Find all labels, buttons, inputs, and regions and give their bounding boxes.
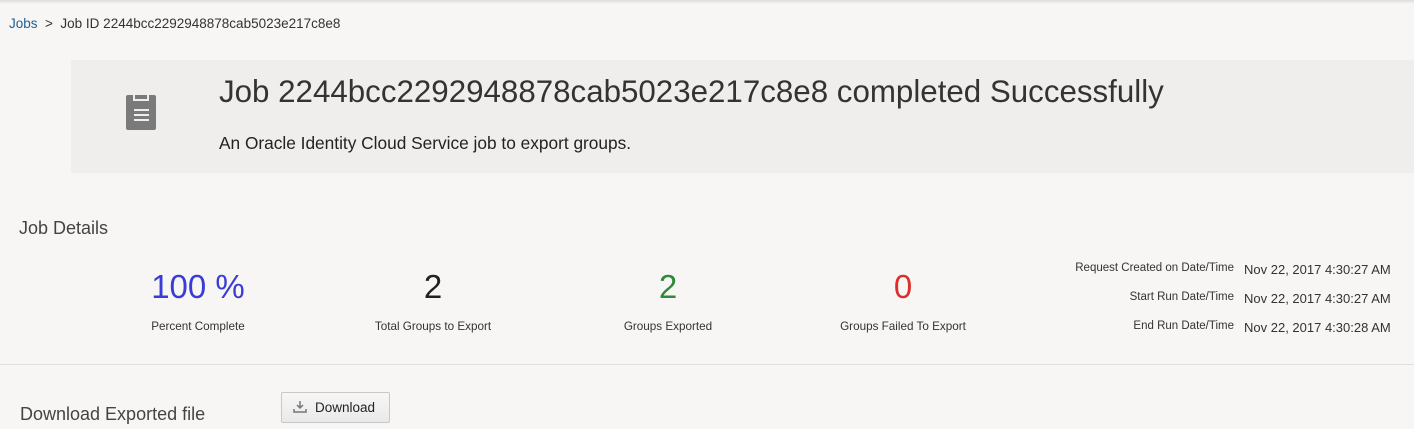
date details: Nov 22, 2017 4:30:27 AM xyxy=(1244,291,1391,306)
stat: total groups: Total Groups to Export xyxy=(375,320,491,333)
title: Job 2244bcc2292948878cab5023e217c8e8 completed Successfully xyxy=(219,74,1164,109)
stat: total groups: 2 xyxy=(424,268,442,305)
header panel xyxy=(71,60,1414,173)
date details: Request Created on Date/Time xyxy=(1075,262,1234,274)
stat: groups exported: Groups Exported xyxy=(624,320,712,333)
stat: groups failed: Groups Failed To Export xyxy=(840,320,966,333)
download label: Download Exported file xyxy=(20,404,205,424)
stat: groups exported xyxy=(624,268,712,333)
download button xyxy=(281,392,390,423)
icon: job clipboard xyxy=(126,95,156,130)
section heading: job details: Job Details xyxy=(19,218,108,238)
breadcrumb: Jobs > Job ID 2244bcc2292948878cab5023e217c8e8 xyxy=(9,16,340,31)
top shadow bar xyxy=(0,0,1414,4)
stat: total groups xyxy=(375,268,492,333)
stat: groups failed: 0 xyxy=(894,268,912,305)
download button: Download xyxy=(315,400,375,415)
date details: Nov 22, 2017 4:30:28 AM xyxy=(1244,320,1391,335)
stat: percent complete: Percent Complete xyxy=(151,320,245,333)
icon: download xyxy=(293,401,307,413)
stat: percent complete: 100 % xyxy=(151,268,245,305)
stat: percent complete xyxy=(151,268,245,333)
date details xyxy=(1075,262,1391,335)
date details: Start Run Date/Time xyxy=(1130,291,1234,303)
subtitle: An Oracle Identity Cloud Service job to export groups. xyxy=(219,133,631,153)
stat: groups exported: 2 xyxy=(659,268,677,305)
date details: End Run Date/Time xyxy=(1133,320,1234,332)
stat: groups failed xyxy=(840,268,966,333)
date details: Nov 22, 2017 4:30:27 AM xyxy=(1244,262,1391,277)
